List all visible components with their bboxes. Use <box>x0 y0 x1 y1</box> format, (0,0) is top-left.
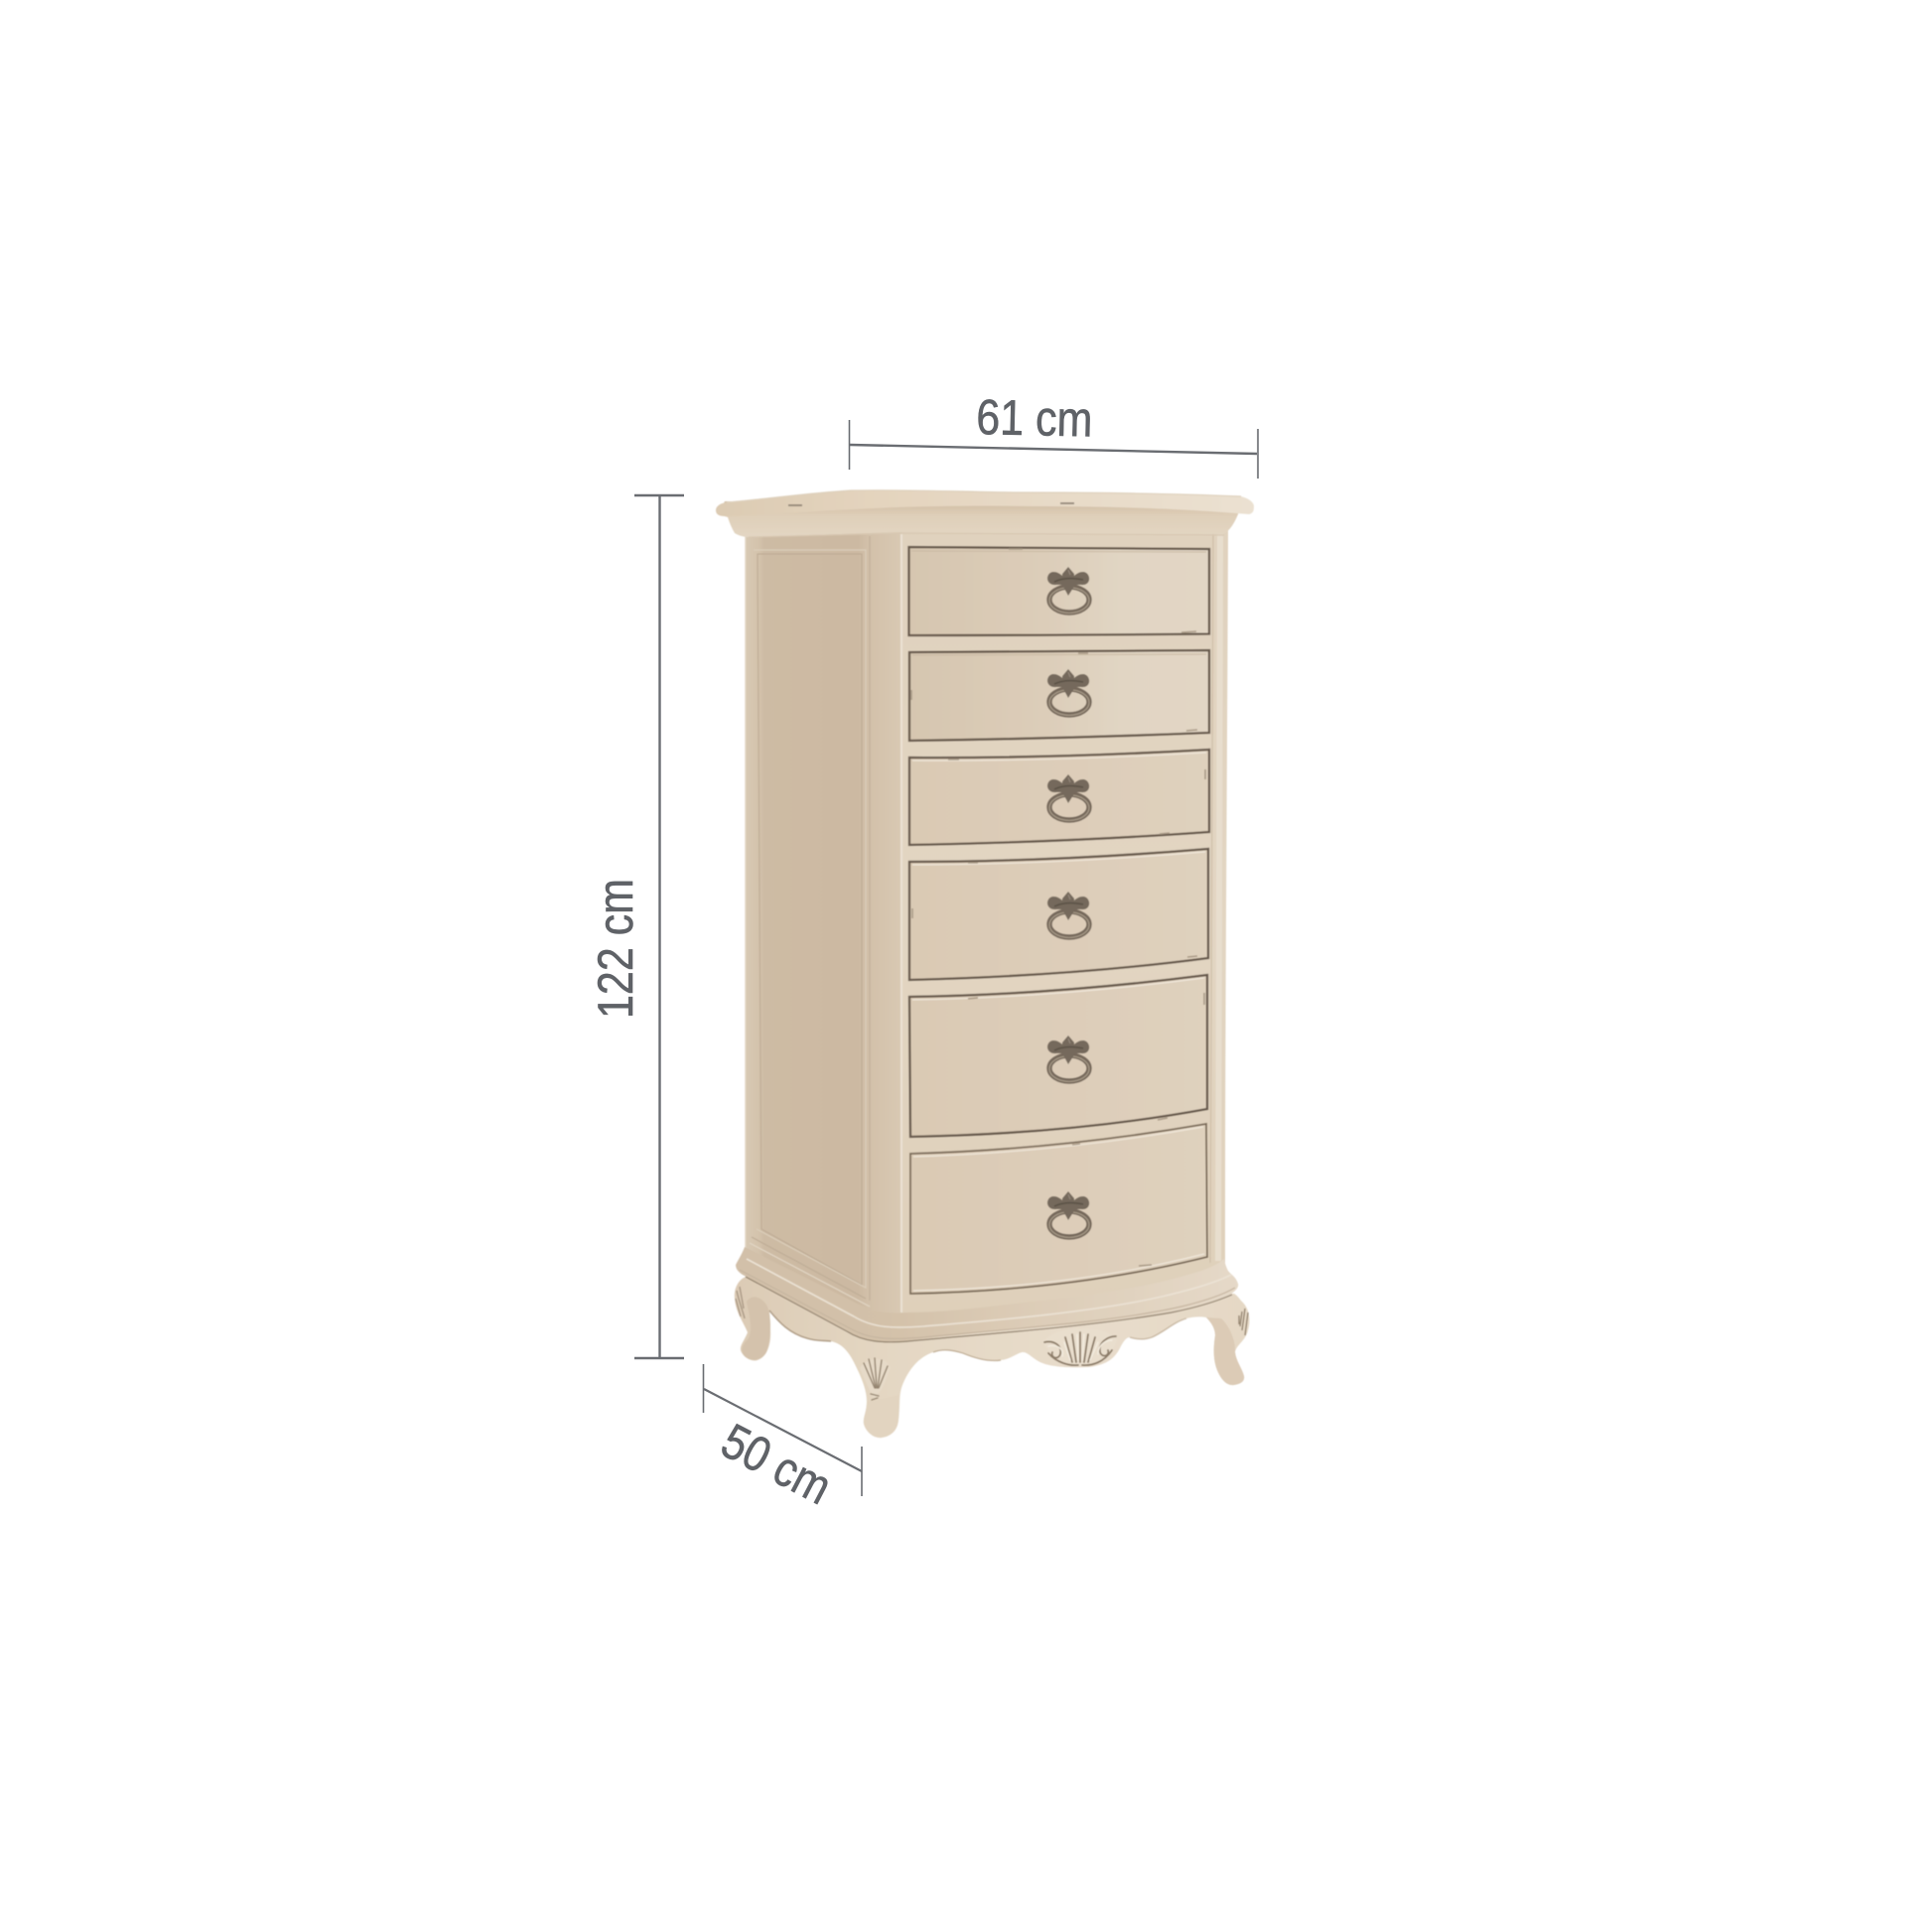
width line with end ticks <box>850 420 1258 479</box>
cornice <box>718 501 1241 537</box>
drawer 1 <box>909 547 1209 635</box>
depth dimension <box>703 1364 862 1515</box>
width label: 61 cm <box>976 389 1093 447</box>
top surface <box>716 490 1254 516</box>
depth label: 50 cm <box>713 1413 841 1515</box>
drawer 3 <box>909 750 1209 845</box>
drawer 5 <box>909 975 1207 1137</box>
ring handle, drawer 2 <box>1047 669 1089 715</box>
ring handle, drawer 4 <box>1047 892 1089 937</box>
ring handle, drawer 5 <box>1047 1035 1089 1081</box>
drawer 6 <box>910 1124 1207 1294</box>
drawer 2 <box>909 650 1209 741</box>
drawer 4 <box>909 849 1208 980</box>
ring handle, drawer 3 <box>1047 774 1089 820</box>
base moulding <box>736 1247 1238 1342</box>
ring handle, drawer 6 <box>1047 1191 1089 1237</box>
height label: 122 cm <box>588 879 643 1019</box>
skirt and legs <box>735 1277 1250 1438</box>
chest of drawers <box>716 490 1254 1438</box>
front frame <box>901 528 1228 1320</box>
carving: back leg left <box>736 1287 745 1318</box>
side panel <box>746 532 901 1316</box>
height line with end caps <box>634 495 684 1358</box>
depth line with end ticks <box>703 1364 862 1496</box>
carving: front leg fan <box>860 1358 891 1400</box>
ring handle, drawer 1 <box>1047 567 1089 613</box>
carving: central shell ornament <box>1042 1328 1117 1366</box>
carving: back leg right <box>1239 1309 1248 1335</box>
width dimension <box>850 389 1258 479</box>
